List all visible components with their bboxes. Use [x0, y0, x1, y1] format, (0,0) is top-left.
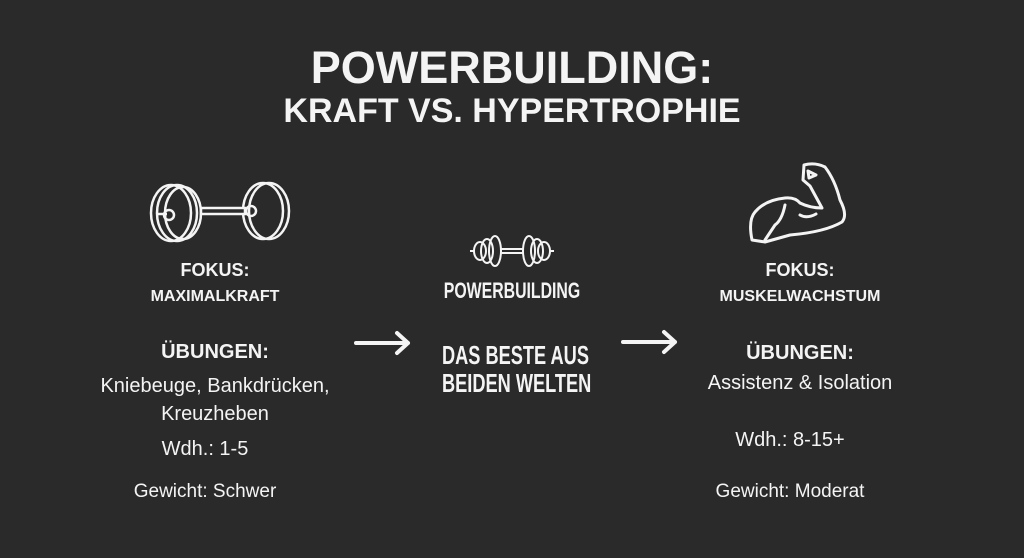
text: das beste aus beiden welten: BEIDEN WELTEN [442, 368, 591, 398]
heading: fokus: FOKUS: [766, 260, 834, 280]
text: übungen list: Assistenz & Isolation [708, 372, 892, 394]
text: wdh: Wdh.: 8-15+ [735, 429, 845, 451]
panel: hypertrophie [708, 162, 892, 502]
text: übungen list: Kniebeuge, Bankdrücken, [100, 375, 330, 397]
text: das beste aus beiden welten: DAS BESTE AUS [442, 340, 589, 370]
heading: übungen: ÜBUNGEN: [746, 342, 854, 364]
text: powerbuilding: POWERBUILDING [444, 278, 580, 303]
arrow: right [621, 330, 678, 354]
icon: small barbell [470, 235, 554, 267]
heading: fokus: FOKUS: [180, 260, 250, 280]
subtitle: KRAFT VS. HYPERTROPHIE [283, 92, 741, 130]
title: POWERBUILDING: [311, 42, 713, 93]
icon: flexed arm [749, 162, 846, 244]
arrow: left [354, 330, 410, 356]
text: muskelwachstum: MUSKELWACHSTUM [720, 288, 880, 305]
text: wdh: Wdh.: 1-5 [162, 438, 248, 460]
text: das beste aus beiden welten [442, 340, 591, 398]
heading: übungen: ÜBUNGEN: [161, 341, 269, 363]
text: gewicht: Gewicht: Schwer [134, 481, 276, 502]
text: übungen list: Kreuzheben [161, 403, 269, 425]
panel: kraft [100, 182, 330, 502]
text: gewicht: Gewicht: Moderat [716, 481, 864, 502]
panel: powerbuilding [442, 235, 591, 398]
text: übungen list [100, 375, 330, 425]
icon: barbell [150, 182, 290, 242]
text: maximalkraft: MAXIMALKRAFT [151, 288, 279, 305]
